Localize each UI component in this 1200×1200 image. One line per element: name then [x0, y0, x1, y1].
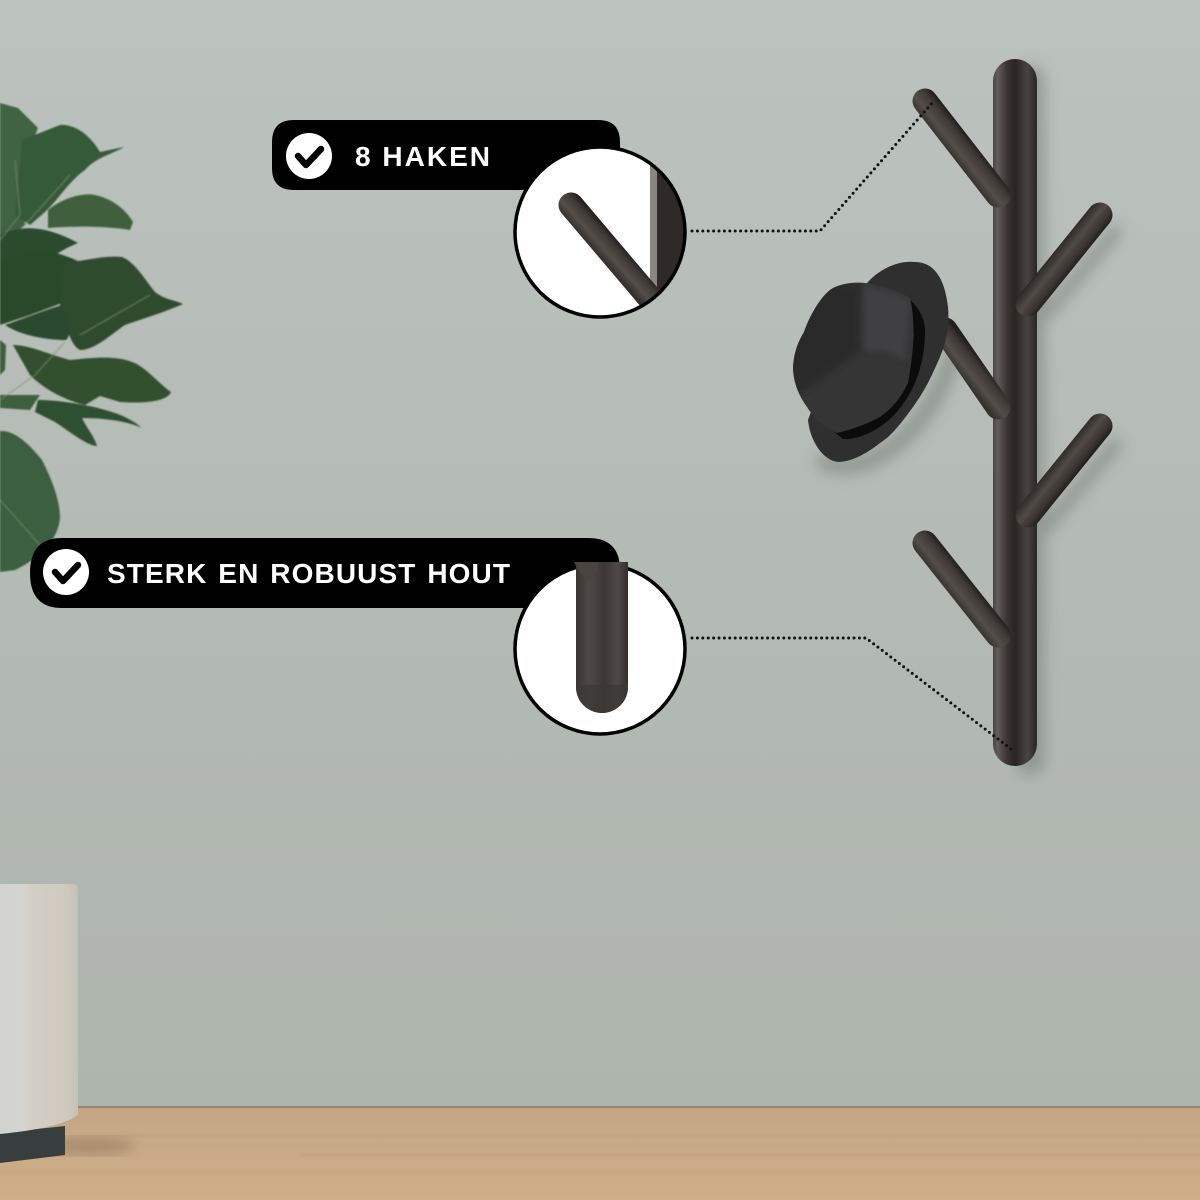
crown — [793, 283, 914, 433]
band — [832, 296, 925, 439]
callout: sterk en robuust hout — [30, 538, 685, 734]
crown fold — [793, 282, 908, 395]
pole — [993, 59, 1037, 766]
icon: check — [286, 133, 332, 179]
icon: check — [43, 549, 89, 595]
wooden tabletop — [0, 1106, 1200, 1200]
hook: middle right — [1028, 426, 1100, 515]
hook: top right — [1028, 215, 1100, 304]
label pill — [272, 120, 620, 190]
label text: STERK EN ROBUUST HOUT — [107, 558, 510, 589]
icon: plant pot — [0, 884, 78, 1163]
coat rack — [925, 59, 1100, 766]
icon: hat — [785, 262, 948, 462]
shadow of coat rack — [825, 80, 1115, 760]
icon: plant — [0, 103, 183, 572]
dotted leader: top — [692, 102, 933, 231]
callout: 8 haken — [272, 120, 700, 330]
hook: top left — [925, 101, 998, 195]
brim — [808, 262, 948, 462]
hook: bottom left — [925, 543, 998, 635]
label pill — [30, 538, 620, 608]
dotted leader: bottom — [692, 638, 1015, 752]
zoom circle — [513, 148, 687, 319]
zoom circle — [515, 562, 685, 734]
hook: middle left — [945, 330, 998, 407]
label text: 8 HAKEN — [355, 141, 490, 172]
